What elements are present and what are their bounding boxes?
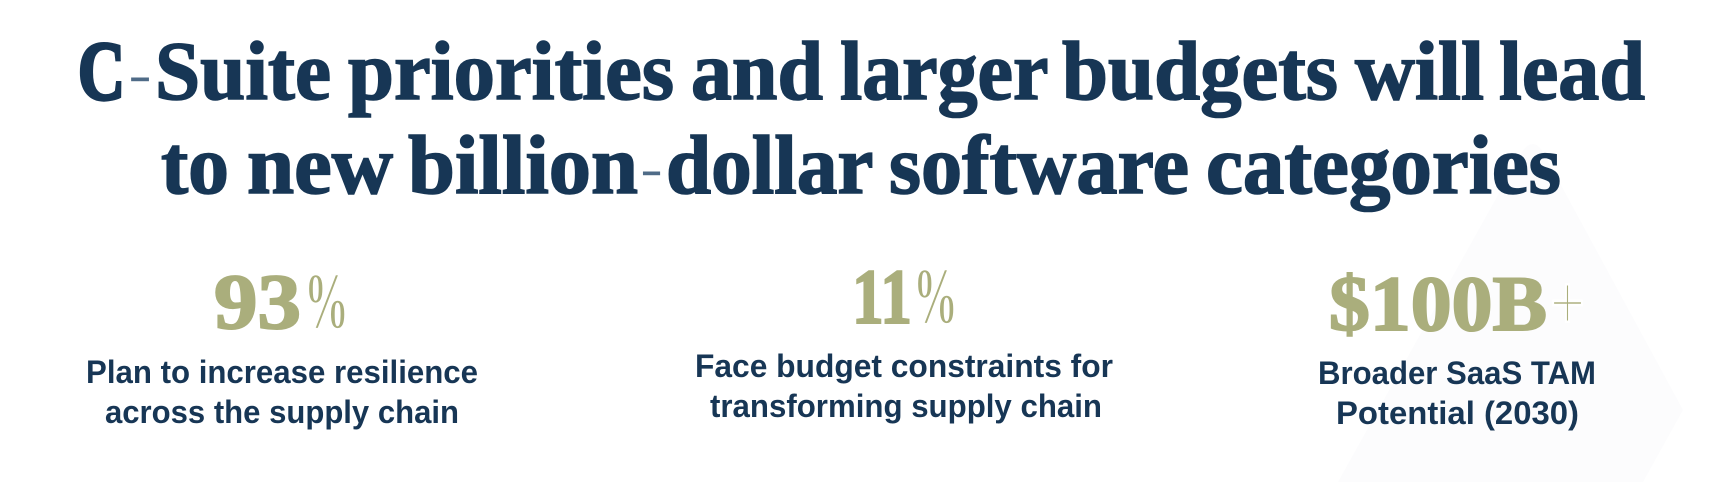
- title: C: [78, 25, 125, 118]
- title: [78, 25, 1645, 212]
- title: software: [889, 119, 1189, 212]
- stat: 11% budget constraints: [695, 253, 1113, 424]
- stat: $100B+ TAM: [1318, 260, 1596, 431]
- title: budgets: [1062, 25, 1338, 118]
- title: to: [161, 119, 229, 212]
- stat value: $100B+: $100B: [1329, 260, 1547, 347]
- stat value: 93%: 93: [214, 258, 301, 345]
- stat label: resilience: [86, 354, 478, 430]
- stat value: 93%: %: [304, 258, 349, 346]
- stat label: budget constraints: [695, 348, 1113, 424]
- stat label: TAM potential: [1318, 355, 1596, 431]
- title: and: [691, 25, 823, 118]
- title: larger: [840, 25, 1047, 118]
- stat label: budget constraints: transforming supply chain: [710, 388, 1102, 424]
- stat label: resilience: across the supply chain: [105, 394, 459, 430]
- stat value: $100B+: +: [1550, 260, 1585, 348]
- stat label: resilience: Plan to increase resilience: [86, 354, 478, 390]
- stat label: TAM potential: Broader SaaS TAM: [1318, 355, 1596, 391]
- title: lead: [1499, 25, 1645, 118]
- title: Suite: [155, 25, 331, 118]
- title: dollar: [666, 119, 872, 212]
- stat value: 11%: 11: [852, 253, 912, 340]
- title: billion: [408, 119, 638, 212]
- title: categories: [1206, 119, 1561, 212]
- background hexagon shape: [1338, 144, 1683, 482]
- stat label: TAM potential: Potential (2030): [1336, 395, 1579, 431]
- title: -: [127, 25, 153, 118]
- title: priorities: [348, 25, 674, 118]
- title: new: [247, 119, 393, 212]
- title: will: [1355, 25, 1484, 118]
- stat label: budget constraints: Face budget constraints for: [695, 348, 1113, 384]
- title: -: [639, 119, 664, 212]
- stat value: 11%: %: [913, 253, 958, 341]
- stat: 93% resilience: [86, 258, 478, 430]
